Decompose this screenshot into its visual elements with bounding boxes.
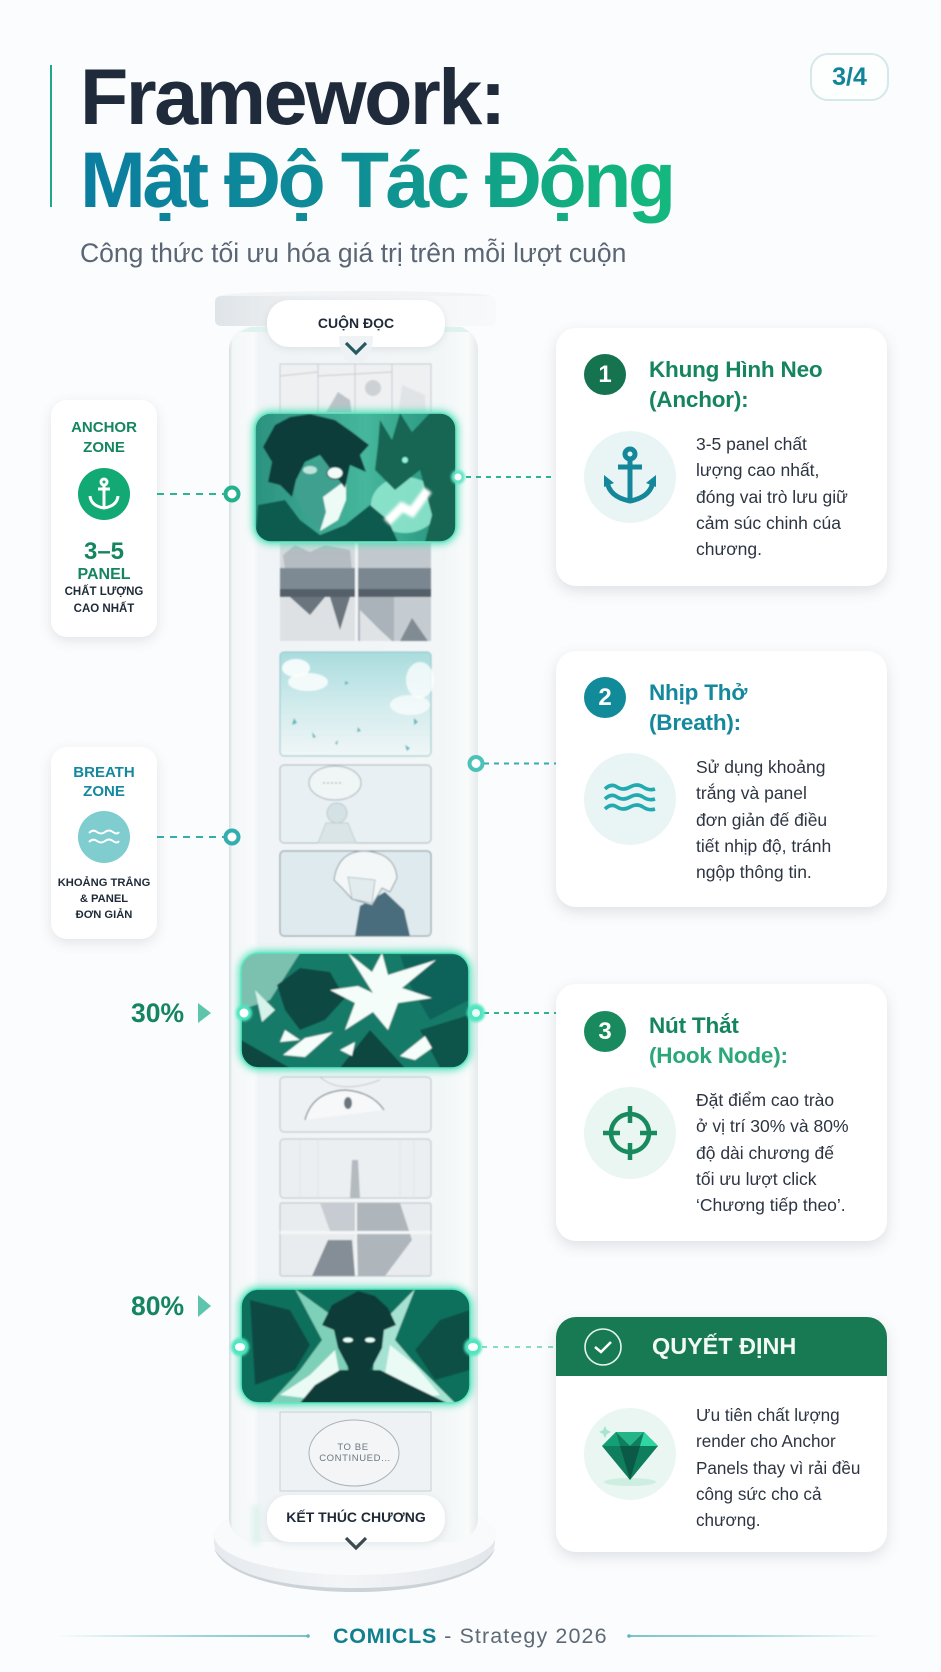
- card 1 number: [584, 354, 626, 395]
- card 1 body: cảm súc chinh cúa: [696, 513, 841, 533]
- card 3 number: [584, 1011, 626, 1052]
- card 3 heading: [649, 1013, 788, 1068]
- decision body: chương.: [696, 1511, 760, 1530]
- tube pedestal base: [214, 1495, 496, 1592]
- marker label 30%: 30%: [131, 998, 184, 1028]
- icon: check: [584, 1328, 622, 1366]
- marker arrow 30%: [198, 1003, 211, 1023]
- card 3 body: Đặt điểm cao trào: [696, 1090, 834, 1110]
- card 1 body: đóng vai trò lưu giữ: [696, 487, 848, 507]
- breath zone heading: BREATH: [73, 764, 135, 781]
- card 2 body: Sử dụng khoảng: [696, 757, 825, 777]
- card 1 body: [696, 434, 848, 559]
- scroll start label: CUỘN ĐỌC: [318, 315, 394, 331]
- marker arrow 80%: [198, 1295, 211, 1317]
- scroll strip: dense panels: [280, 542, 431, 641]
- final panel: to be continued: TO BE: [337, 1442, 369, 1453]
- breath panel: boy: [280, 851, 431, 936]
- icon: breath zone: [78, 811, 130, 863]
- final panel: to be continued: CONTINUED...: [319, 1453, 391, 1464]
- breath zone description: KHOẢNG TRẮNG: [58, 877, 150, 889]
- card 3 heading: Nút Thắt: [649, 1013, 739, 1038]
- card 3 body: tối ưu lượt click: [696, 1169, 816, 1189]
- card 2 heading: Nhịp Thở: [649, 680, 747, 705]
- connector: anchor zone: [157, 488, 238, 500]
- anchor zone number: 3–5: [84, 538, 124, 565]
- decision title: QUYẾT ĐỊNH: [652, 1333, 796, 1359]
- icon: chevron end: [344, 1536, 368, 1550]
- icon: anchor zone: [78, 468, 130, 520]
- panel: breath zone: [51, 747, 157, 939]
- tube lid: [215, 291, 496, 332]
- breath zone description: ĐƠN GIẢN: [76, 909, 132, 921]
- decision body: render cho Anchor: [696, 1432, 836, 1451]
- heading accent bar: [50, 65, 52, 207]
- title: [80, 52, 673, 224]
- scroll end label: KẾT THÚC CHƯƠNG: [286, 1509, 426, 1525]
- icon: anchor: [584, 431, 676, 523]
- anchor zone heading: [71, 419, 137, 456]
- scroll strip: forest panel: [280, 1139, 431, 1198]
- climax panel highlight: [239, 1287, 472, 1405]
- anchor zone description: CHẤT LƯỢNG: [65, 586, 143, 598]
- scroll strip: small panels top: [280, 364, 431, 416]
- subtitle: Công thức tối ưu hóa giá trị trên mỗi lượt cuộn: [80, 238, 626, 268]
- footer line right: [627, 1634, 885, 1638]
- title: Mật Độ Tác Động: [80, 135, 673, 224]
- card 1 body: 3-5 panel chất: [696, 434, 807, 454]
- connector: card 1: [451, 470, 556, 484]
- final panel: to be continued: [280, 1412, 431, 1491]
- anchor zone description: [65, 584, 143, 615]
- card 3 body: ở vị trí 30% và 80%: [696, 1116, 849, 1136]
- card 1 body: chương.: [696, 539, 762, 559]
- card 1 heading: [649, 357, 822, 412]
- card 2 heading: (Breath):: [649, 710, 741, 735]
- title: Framework:: [80, 52, 504, 141]
- breath zone heading: [73, 764, 135, 800]
- card 1 number: 1: [598, 361, 612, 388]
- icon: waves: [584, 753, 676, 845]
- panel: card 1 anchor: [556, 328, 887, 586]
- panel: decision card: [556, 1317, 887, 1552]
- card 2 heading: [649, 680, 748, 735]
- connector: decision: [231, 1338, 556, 1356]
- connector: breath zone: [157, 830, 238, 844]
- anchor zone heading: ZONE: [83, 439, 125, 456]
- marker label 80%: 80%: [131, 1291, 184, 1321]
- decision body: công sức cho cả: [696, 1485, 821, 1504]
- breath panel: speech bubble: [280, 765, 431, 843]
- scroll strip: eye panel: [280, 1077, 431, 1132]
- card 3 body: ‘Chương tiếp theo’.: [696, 1195, 846, 1215]
- decision body: [696, 1406, 860, 1530]
- panel: card 3 hook: [556, 984, 887, 1241]
- icon: chevron start: [339, 336, 373, 356]
- panel: anchor zone: [51, 400, 157, 637]
- card 2 body: [696, 757, 831, 882]
- connector: card 3: [236, 1004, 556, 1022]
- scroll start label: [267, 300, 445, 347]
- icon: gem: [584, 1408, 676, 1500]
- breath zone heading: ZONE: [83, 783, 125, 800]
- anchor panel highlight: [253, 411, 458, 544]
- footer: COMICLS - Strategy 2026: [333, 1624, 608, 1648]
- breath panel: sky: [280, 652, 434, 756]
- anchor zone unit: PANEL: [77, 566, 131, 583]
- card 2 number: [584, 677, 626, 718]
- connector: card 2: [470, 757, 556, 770]
- decision body: Ưu tiên chất lượng: [696, 1406, 840, 1425]
- page badge: [810, 53, 889, 101]
- footer line left: [57, 1634, 310, 1638]
- burst panel highlight: [239, 951, 471, 1070]
- decision header: [556, 1317, 887, 1376]
- card 3 body: [696, 1090, 849, 1215]
- card 1 heading: (Anchor):: [649, 387, 748, 412]
- card 1 heading: Khung Hình Neo: [649, 357, 822, 382]
- page badge: 3/4: [832, 63, 867, 91]
- breath zone description: & PANEL: [80, 893, 128, 905]
- scroll strip: grid panel: [280, 1203, 431, 1276]
- card 2 number: 2: [598, 684, 612, 711]
- card 2 body: ngộp thông tin.: [696, 862, 812, 882]
- card 2 body: tiết nhịp độ, tránh: [696, 836, 831, 856]
- card 3 number: 3: [598, 1018, 612, 1045]
- decision body: Panels thay vì rải đều: [696, 1459, 860, 1478]
- card 1 body: lượng cao nhất,: [696, 460, 819, 480]
- card 3 heading: (Hook Node):: [649, 1043, 788, 1068]
- card 2 body: đơn giản đế điều: [696, 810, 827, 830]
- breath zone description: [58, 876, 150, 921]
- card 2 body: trắng và panel: [696, 783, 807, 803]
- glass tube: [229, 326, 478, 1545]
- anchor zone heading: ANCHOR: [71, 419, 137, 436]
- anchor zone description: CAO NHẤT: [74, 603, 134, 615]
- panel: card 2 breath: [556, 651, 887, 907]
- scroll end label: [267, 1495, 445, 1542]
- card 3 body: độ dài chương đế: [696, 1143, 834, 1163]
- icon: target: [584, 1087, 676, 1179]
